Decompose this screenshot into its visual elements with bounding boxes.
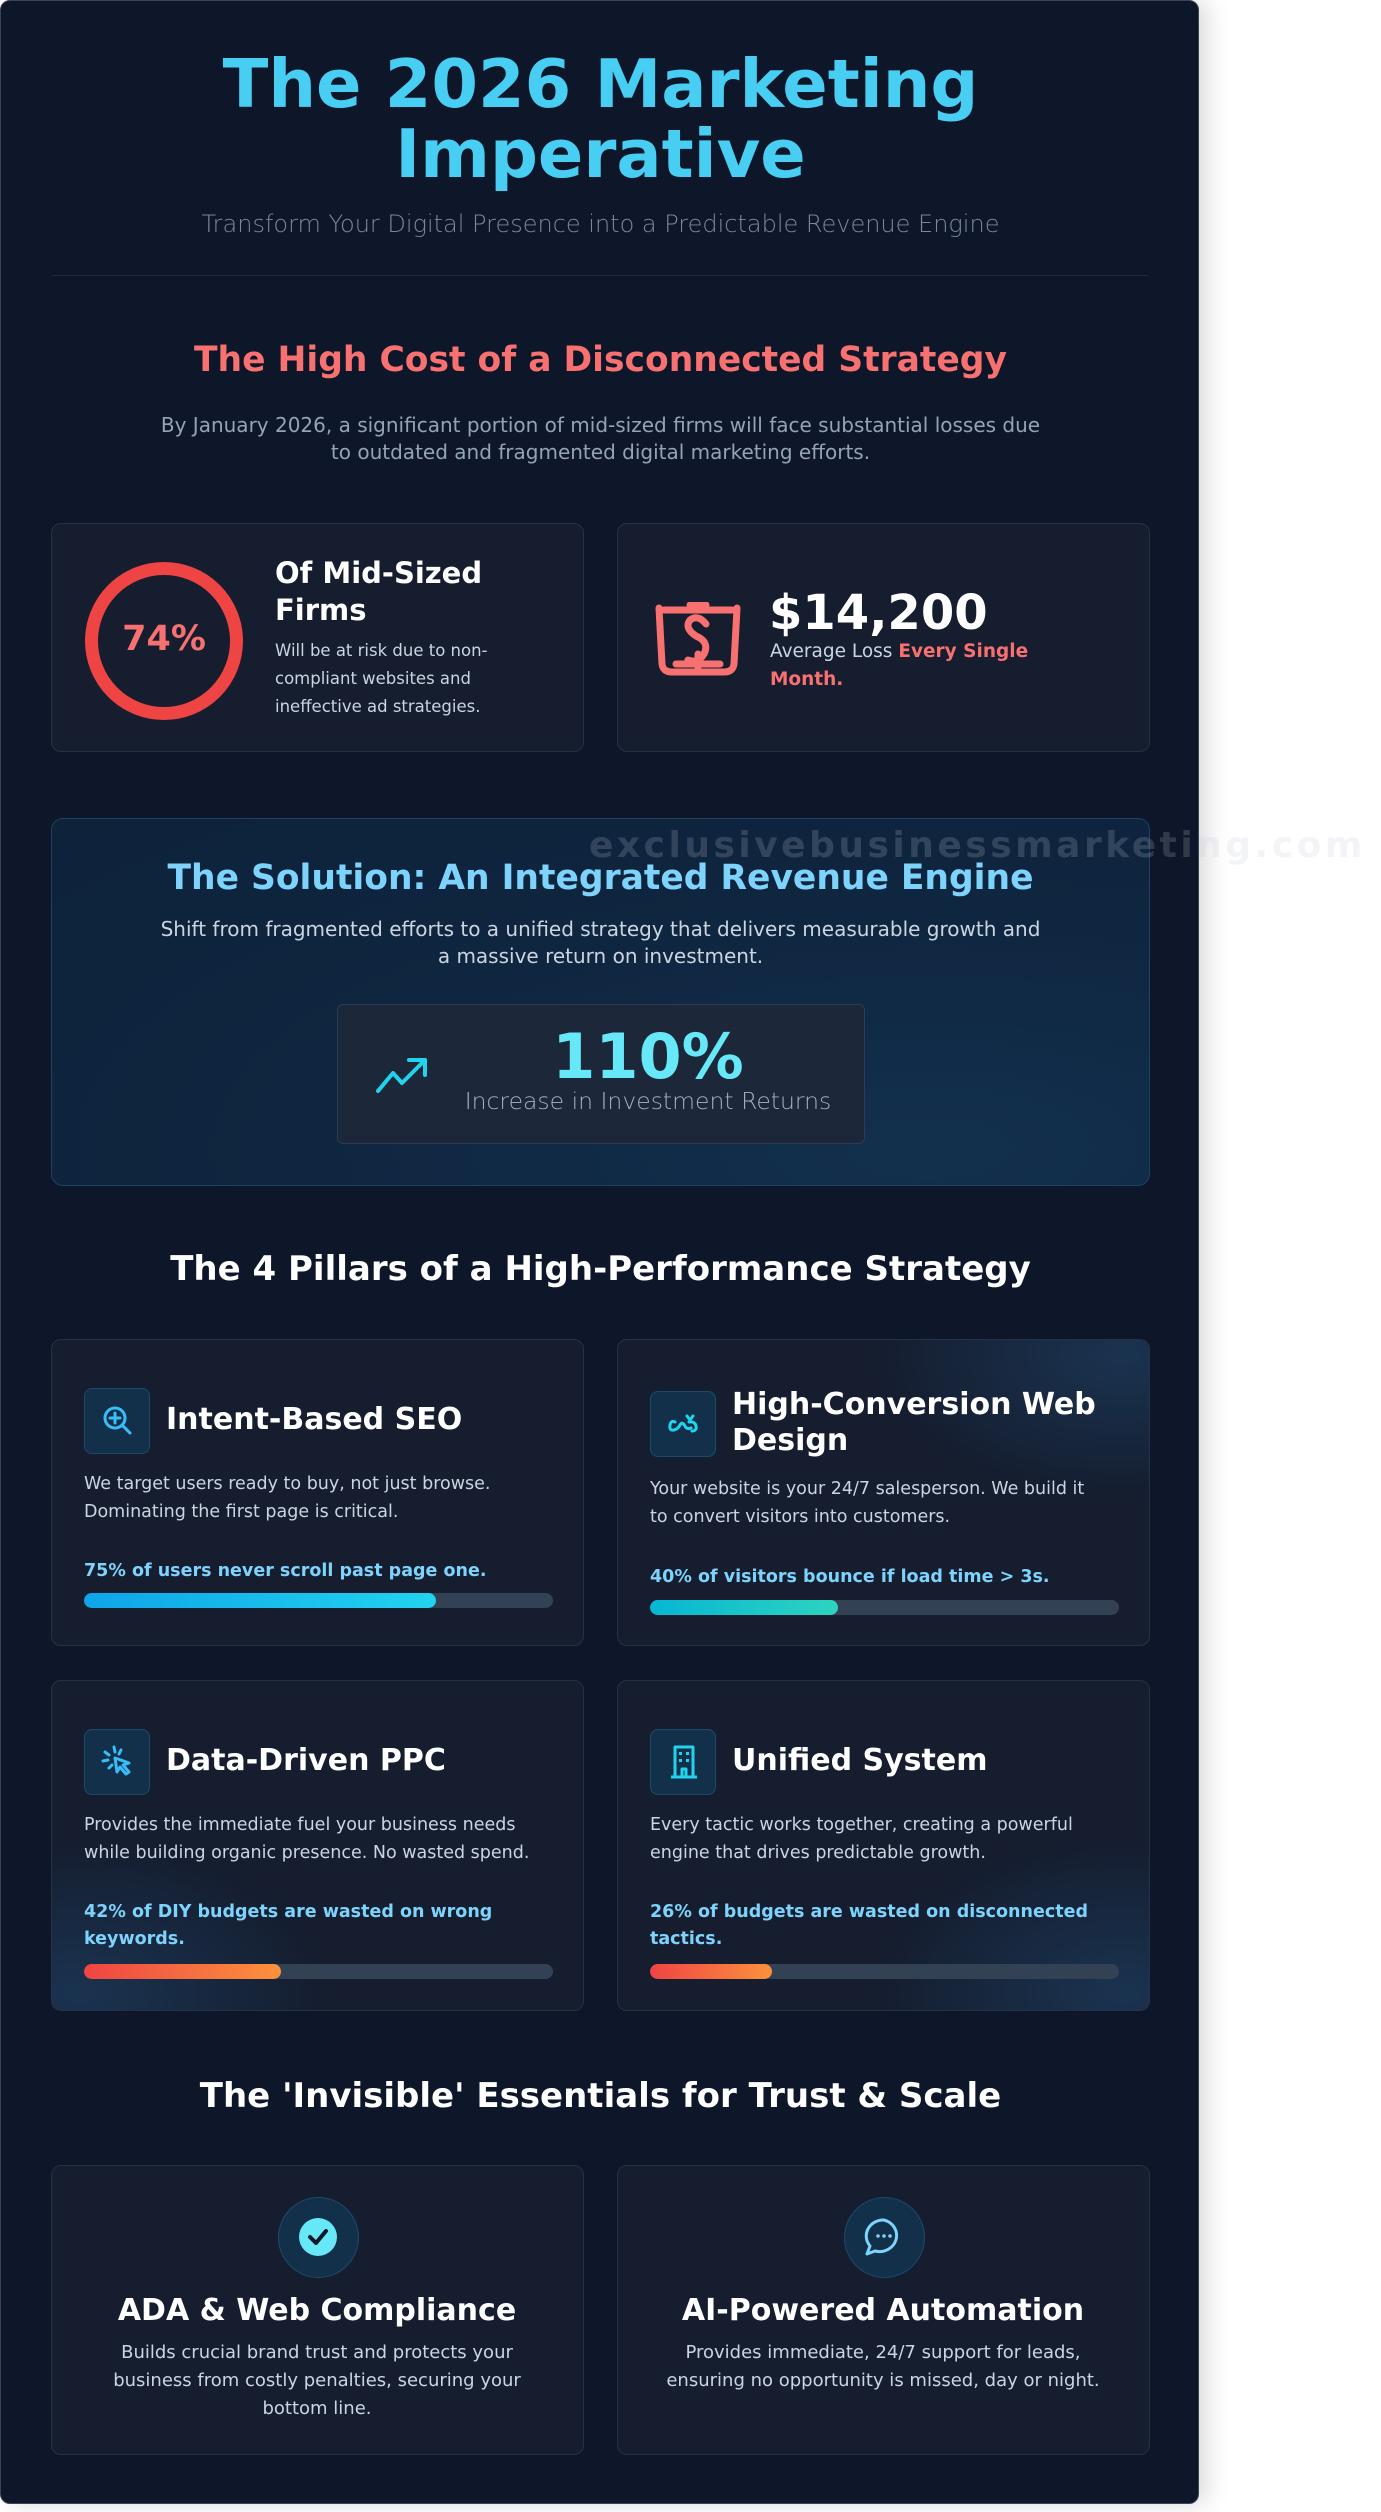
title: Unified System <box>732 1743 987 1778</box>
heading: of mid-sized firms: Of Mid-Sized <box>275 556 482 590</box>
title: The 2026 Marketing <box>223 45 978 123</box>
bar: 40% <box>650 1600 1119 1615</box>
title: Design <box>732 1423 848 1458</box>
icon: chat bubble <box>844 2197 925 2278</box>
bar: 42% <box>84 1964 553 1979</box>
stat: 75% of users never scroll past page one. <box>84 1561 486 1581</box>
stat value 110%: 110% <box>552 1020 744 1093</box>
panel: $14,200 stat <box>617 523 1150 752</box>
stat value 74%: 74% <box>122 619 206 659</box>
stat: 40% of visitors bounce if load time > 3s. <box>650 1567 1050 1587</box>
title: Data-Driven PPC <box>166 1743 446 1778</box>
bar: 26% <box>650 1964 1119 1979</box>
heading: high cost: The High Cost of a Disconnected Strategy <box>194 340 1007 380</box>
title: High-Conversion Web <box>732 1387 1096 1422</box>
heading: solution: The Solution: An Integrated Revenue Engine <box>168 858 1033 898</box>
stat value $14,200: $14,200 <box>769 585 988 641</box>
title <box>732 1387 1096 1458</box>
text: average loss: Average Loss Every Single Month. <box>770 641 1028 690</box>
icon: building <box>650 1729 716 1795</box>
text: Provides immediate, 24/7 support for leads, ensuring no opportunity is missed, day or night. <box>666 2342 1100 2391</box>
panel: unified system <box>617 1680 1150 2011</box>
icon: money loss <box>656 602 740 676</box>
title: AI-Powered Automation <box>682 2293 1084 2328</box>
text: We target users ready to buy, not just browse. Dominating the first page is critical. <box>84 1474 490 1522</box>
text: intro paragraph: By January 2026, a significant portion of mid-sized firms will face substantial losses due to outdated and fragmented digital marketing efforts. <box>161 413 1040 464</box>
title: ADA & Web Compliance <box>118 2293 516 2328</box>
text: Builds crucial brand trust and protects your business from costly penalties, securing your bottom line. <box>113 2342 521 2419</box>
panel: AI automation <box>617 2165 1150 2455</box>
title: Intent-Based SEO <box>166 1402 462 1437</box>
callout: 110% <box>337 1004 865 1144</box>
stat: 26% of budgets are wasted on disconnected tactics. <box>650 1902 1088 1949</box>
title: Imperative <box>395 115 806 193</box>
subtitle: Transform Your Digital Presence into a Predictable Revenue Engine <box>202 210 999 238</box>
heading: of mid-sized firms <box>275 556 482 627</box>
heading: of mid-sized firms: Firms <box>275 593 367 627</box>
text: solution paragraph: Shift from fragmented efforts to a unified strategy that delivers measurable growth and a massive return on investment. <box>161 917 1040 968</box>
panel: 74% stat <box>51 523 584 752</box>
text: increase label: Increase in Investment Returns <box>465 1087 831 1115</box>
heading: invisible essentials: The 'Invisible' Essentials for Trust & Scale <box>200 2076 1001 2116</box>
icon: link <box>650 1391 716 1457</box>
panel: solution <box>51 818 1150 1186</box>
text: Provides the immediate fuel your business needs while building organic presence. No wasted spend. <box>84 1815 529 1863</box>
panel: web design <box>617 1339 1150 1646</box>
stat: 42% of DIY budgets are wasted on wrong keywords. <box>84 1902 492 1949</box>
icon: cursor click <box>84 1729 150 1795</box>
title <box>222 45 978 193</box>
icon: search <box>84 1388 150 1454</box>
icon: trending up <box>376 1058 428 1094</box>
heading: 4 pillars: The 4 Pillars of a High-Performance Strategy <box>170 1249 1031 1289</box>
text: risk description: Will be at risk due to non-compliant websites and ineffective ad strategies. <box>275 641 488 716</box>
icon: check badge <box>278 2197 359 2278</box>
chart: 74% ring <box>85 562 243 720</box>
text: Every tactic works together, creating a powerful engine that drives predictable growth. <box>650 1815 1073 1863</box>
panel: intent-based SEO <box>51 1339 584 1646</box>
watermark: exclusivebusinessmarketing.com <box>589 825 1366 866</box>
bar: 75% <box>84 1593 553 1608</box>
text: Your website is your 24/7 salesperson. We build it to convert visitors into customers. <box>650 1479 1084 1527</box>
panel: ADA compliance <box>51 2165 584 2455</box>
panel: PPC <box>51 1680 584 2011</box>
